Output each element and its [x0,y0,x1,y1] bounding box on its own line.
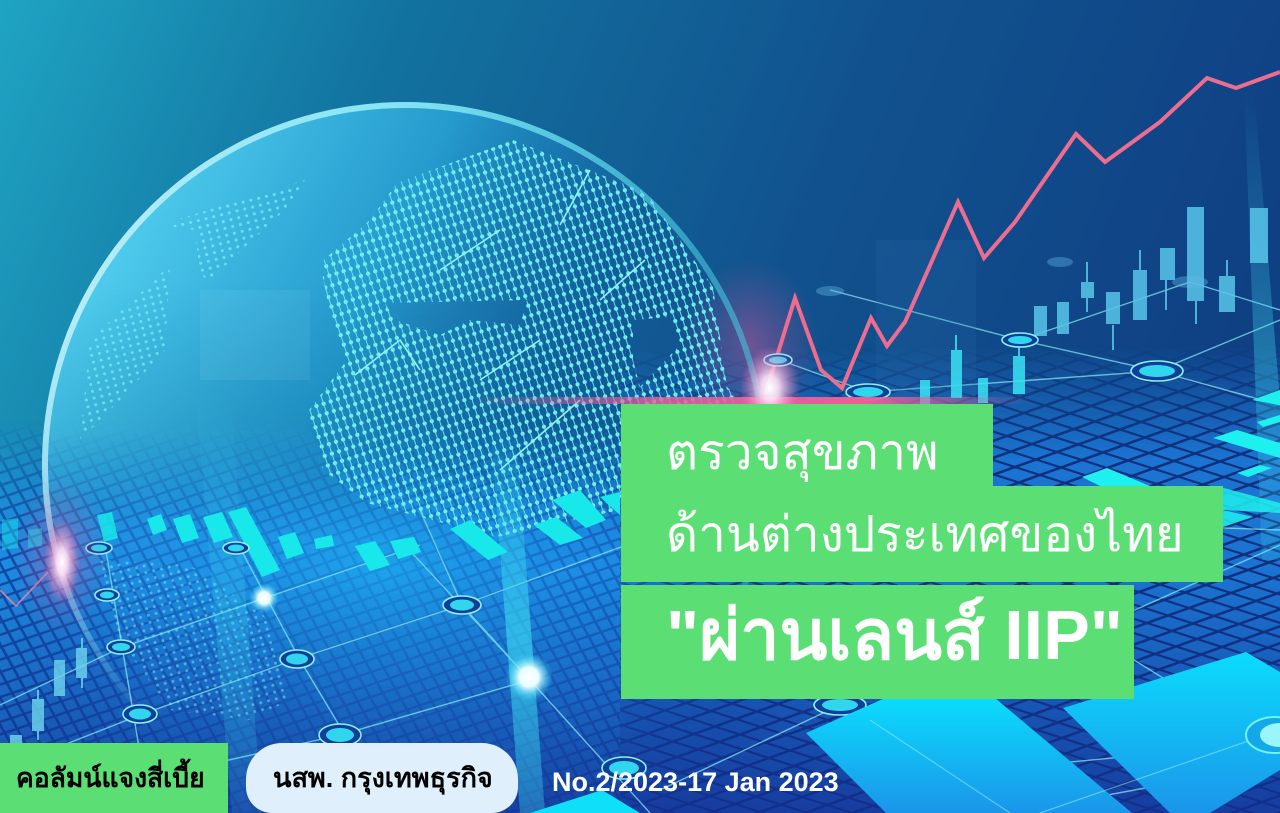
title line 1: ตรวจสุขภาพ [666,425,939,480]
globe continents [80,140,740,720]
title box: line 1 [621,404,993,487]
pink trend line [0,72,1280,606]
flares and horizon streak [12,346,1030,636]
title line 2: ด้านต่างประเทศของไทย [666,507,1184,562]
cyan floor panels [530,390,1280,813]
issue and date: No.2/2023-17 Jan 2023 [552,767,839,797]
grid floor [0,345,1280,813]
candlestick bars on globe [2,490,620,577]
lower left candlesticks [10,638,87,745]
column label: คอลัมน์แจงสี่เบี้ย [16,763,205,793]
right candlesticks [920,207,1268,405]
title line 3: "ผ่านเลนส์ IIP" [666,596,1123,674]
source pill: นสพ. กรุงเทพธุรกิจ [273,763,493,793]
grid connector lines [0,282,1280,813]
panel highlight lines [870,720,1280,813]
pale panel behind chart [876,240,976,410]
column label [0,743,228,813]
glowing nodes [249,583,553,701]
globe [42,102,762,720]
title box: line 3 [621,585,1134,699]
source pill [246,743,518,813]
title panel [621,404,1223,699]
bottom right glowing node [1246,717,1280,753]
title box: line 2 [621,486,1223,582]
pink wash behind flare [680,260,820,430]
light beams [195,90,1280,813]
grid node rings [86,257,1208,779]
